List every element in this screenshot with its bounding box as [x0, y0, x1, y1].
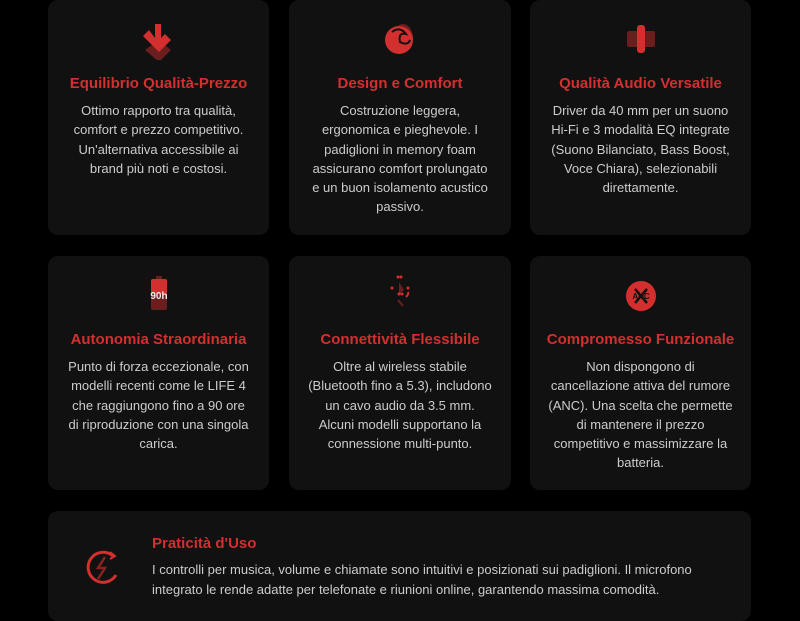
text: [74, 103, 243, 176]
title: Praticità d'Uso: [152, 535, 256, 552]
icon: plus: [627, 25, 655, 53]
title: Design e Comfort: [337, 75, 462, 92]
text: Non dispongono di: [586, 359, 695, 374]
text: [152, 562, 692, 596]
icon: battery 90h: 90h: [150, 291, 167, 302]
text: comfort e prezzo competitivo.: [74, 122, 243, 137]
text: cancellazione attiva del rumore: [551, 378, 730, 393]
text: di mantenere il prezzo: [577, 417, 704, 432]
text: [548, 359, 733, 470]
text: [551, 103, 730, 195]
title: Compromesso Funzionale: [547, 331, 734, 348]
text: I controlli per musica, volume e chiamate sono intuitivi e posizionati sui padiglioni. Il microfono: [152, 562, 692, 577]
title: Connettività Flessibile: [320, 331, 480, 348]
icon: swirl: [385, 24, 413, 54]
icon: battery 90h: [150, 276, 167, 310]
text: (ANC). Una scelta che permette: [548, 398, 733, 413]
text: carica.: [139, 436, 178, 451]
text: Costruzione leggera,: [340, 103, 460, 118]
text: (Suono Bilanciato, Bass Boost,: [551, 142, 730, 157]
text: [308, 359, 492, 451]
panel: compromesso: [530, 256, 751, 490]
text: Alcuni modelli supportano la: [319, 417, 481, 432]
text: Voce Chiara), selezionabili: [564, 161, 717, 176]
icon: bluetooth: [390, 276, 410, 306]
text: brand più noti e costosi.: [90, 161, 227, 176]
text: Ottimo rapporto tra qualità,: [81, 103, 236, 118]
text: ergonomica e pieghevole. I: [322, 122, 478, 137]
text: connessione multi-punto.: [328, 436, 472, 451]
text: passivo.: [376, 199, 424, 214]
text: competitivo e massimizzare la: [554, 436, 727, 451]
panel: equilibrio: [48, 0, 269, 235]
title: Equilibrio Qualità-Prezzo: [70, 75, 247, 92]
icon: no ANC: ANC: [632, 292, 649, 301]
title: Autonomia Straordinaria: [71, 331, 246, 348]
icon: power cycle: [86, 550, 118, 584]
title: Qualità Audio Versatile: [559, 75, 722, 92]
panel: audio: [530, 0, 751, 235]
text: integrato le rende adatte per telefonate e riunioni online, garantendo massima comodità.: [152, 582, 659, 596]
text: padiglioni in memory foam: [324, 142, 476, 157]
text: Punto di forza eccezionale, con: [68, 359, 249, 374]
text: assicurano comfort prolungato: [313, 161, 487, 176]
icon: arrows down: [143, 24, 171, 60]
text: Oltre al wireless stabile: [333, 359, 467, 374]
text: [312, 103, 488, 214]
panel: design: [289, 0, 511, 235]
panel: praticità: [48, 511, 751, 621]
text: un cavo audio da 3.5 mm.: [325, 398, 475, 413]
text: e un buon isolamento acustico: [312, 180, 488, 195]
text: Hi-Fi e 3 modalità EQ integrate: [551, 122, 730, 137]
panel: connettività: [289, 256, 511, 490]
text: [68, 359, 249, 451]
text: direttamente.: [603, 180, 678, 195]
text: che raggiungono fino a 90 ore: [72, 398, 245, 413]
text: (Bluetooth fino a 5.3), includono: [308, 378, 492, 393]
text: batteria.: [617, 455, 664, 470]
text: Un'alternativa accessibile ai: [78, 142, 238, 157]
icon: no ANC: [626, 281, 656, 311]
panel: autonomia: [48, 256, 269, 490]
text: modelli recenti come le LIFE 4: [71, 378, 246, 393]
text: di riproduzione con una singola: [69, 417, 248, 432]
text: Driver da 40 mm per un suono: [553, 103, 728, 118]
